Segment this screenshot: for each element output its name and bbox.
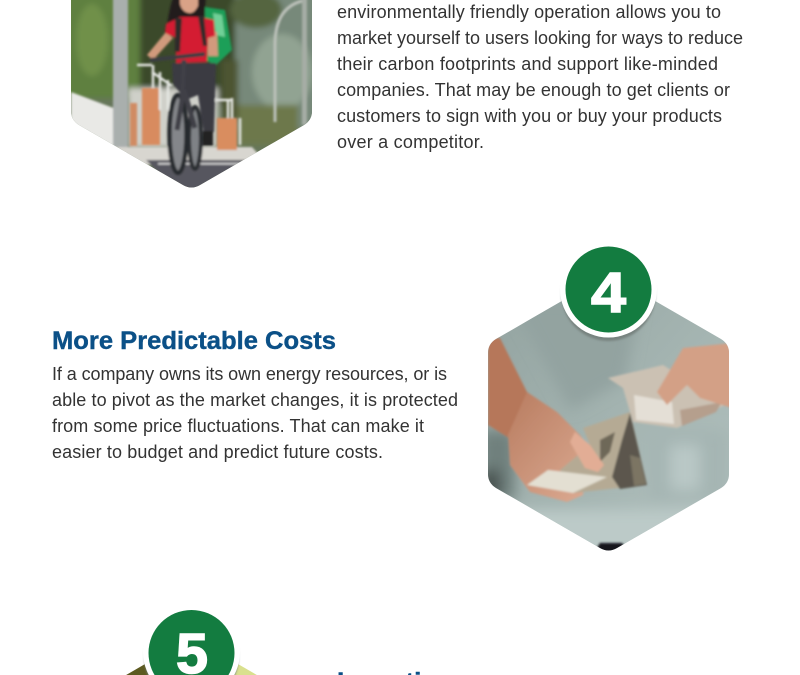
body text: section 3: companies. That may be enough to get clients or [337,80,730,100]
body text: section 3: customers to sign with you or buy your products [337,106,722,126]
body text: section 4: able to pivot as the market changes, it is protected [52,390,458,410]
badge: number 4: 4 [591,261,626,325]
panel: section 5 incentives [126,610,420,675]
body text: section 3: over a competitor. [337,132,484,152]
panel: section 4 more predictable costs [52,240,732,556]
photo: hexagon image cropped by the page edge [126,664,257,675]
badge: number 4 [560,240,657,341]
photo: courier riding a bicycle in a hexagon [66,0,320,192]
heading: More Predictable Costs: More Predictable Costs [52,327,336,355]
body text: section 3: market yourself to users looking for ways to reduce [337,28,743,48]
body text: section 4: from some price fluctuations. That can make it [52,416,424,436]
badge: number 5 [143,604,240,675]
panel: section 3 zero-emission delivery [66,0,747,192]
body text: section 3: environmentally friendly operation allows you to [337,2,721,22]
body text: section 3: their carbon footprints and support like-minded [337,54,718,74]
body text: section 4: easier to budget and predict future costs. [52,442,383,462]
body text: section 4: If a company owns its own energy resources, or is [52,364,447,384]
photo: hands holding out dollar bills in a hexagon [488,301,729,550]
